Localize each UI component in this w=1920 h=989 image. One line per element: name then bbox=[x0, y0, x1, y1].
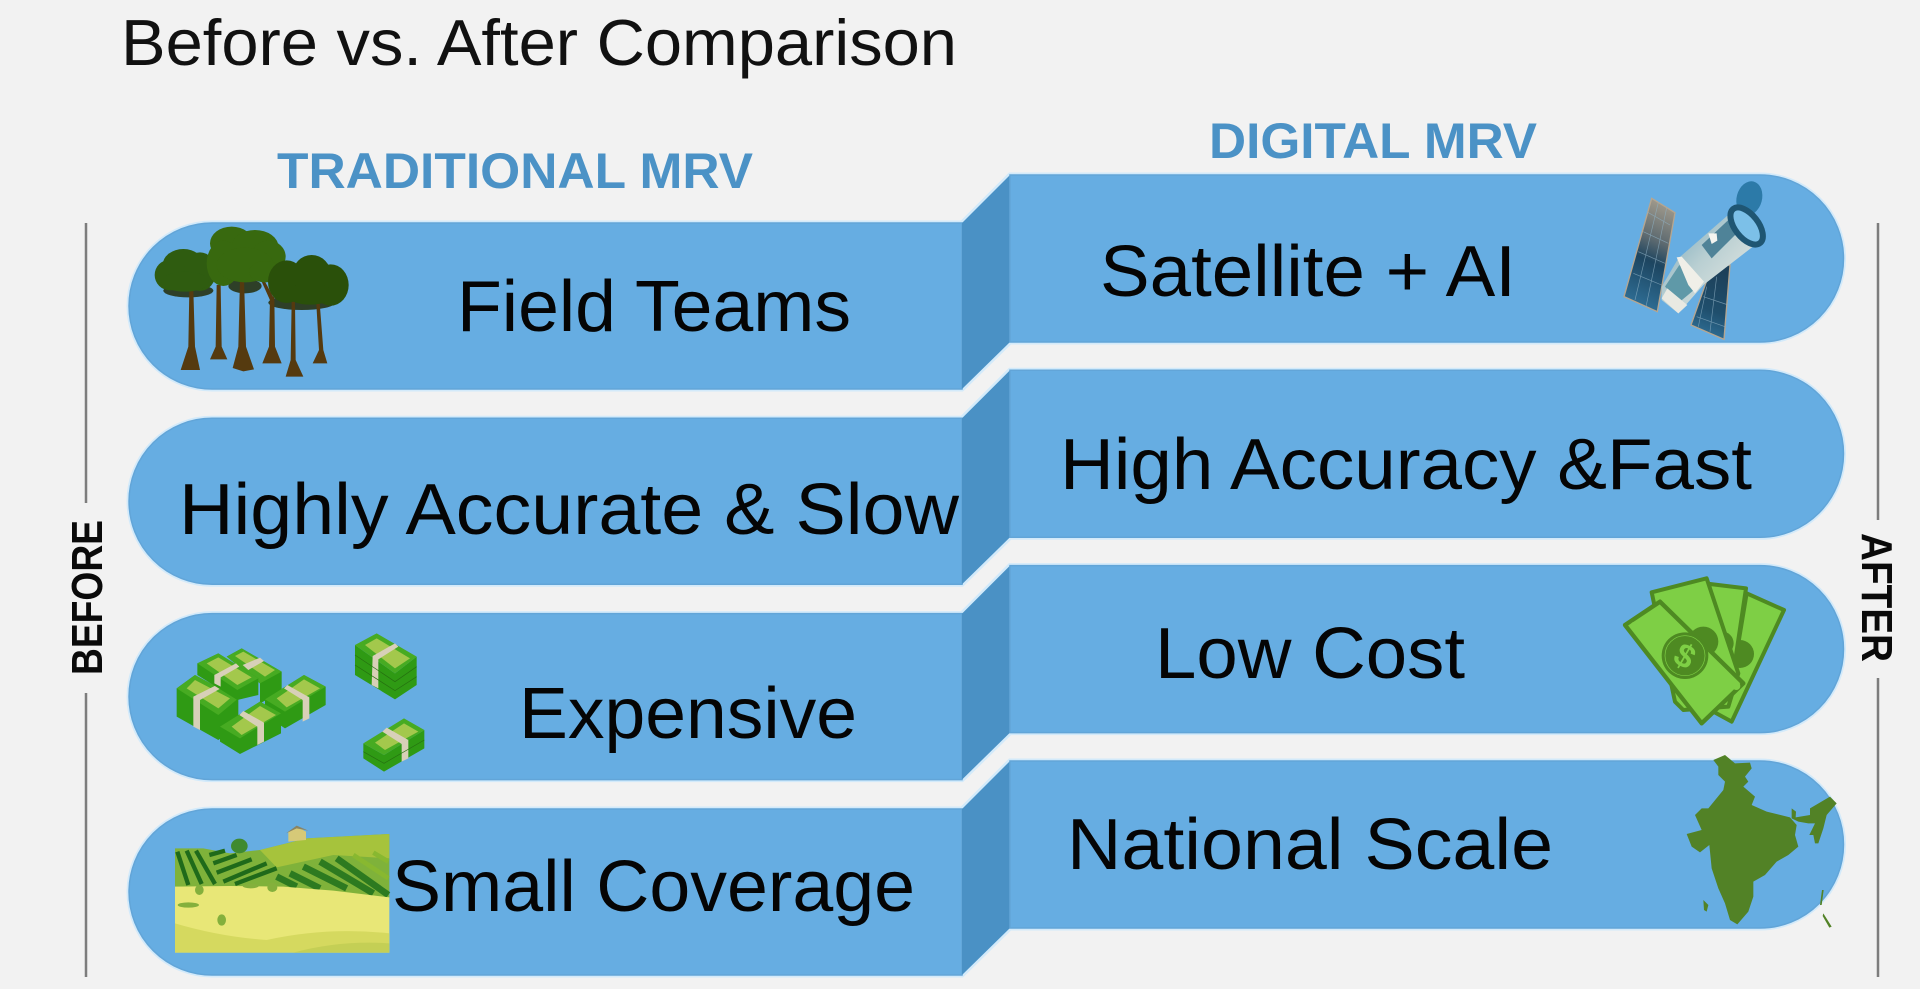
text: small coverage: Small Coverage bbox=[392, 847, 915, 927]
text: national scale: National Scale bbox=[1067, 805, 1553, 885]
icon: India map bbox=[1687, 755, 1837, 928]
icon: satellite bbox=[1624, 178, 1769, 339]
back bill right bbox=[1713, 593, 1784, 722]
row 1 ribbon bbox=[129, 175, 1844, 389]
heading: traditional MRV: TRADITIONAL MRV bbox=[277, 143, 754, 199]
heading: digital MRV: DIGITAL MRV bbox=[1209, 113, 1538, 169]
before axis line bbox=[85, 223, 87, 977]
after label: AFTER bbox=[1852, 533, 1901, 662]
cash stack lower right bbox=[363, 718, 424, 772]
text: high accuracy and fast: High Accuracy &Fast bbox=[1060, 425, 1752, 505]
text: field teams: Field Teams bbox=[457, 267, 851, 347]
back bill middle bbox=[1697, 584, 1746, 700]
text: low cost: Low Cost bbox=[1155, 614, 1465, 694]
icon: cash stacks bbox=[177, 633, 424, 772]
front bill bbox=[1625, 602, 1743, 723]
back bill left bbox=[1652, 578, 1738, 710]
row 4 ribbon bbox=[129, 761, 1844, 975]
before label: BEFORE bbox=[63, 520, 112, 675]
icon: banknotes fan bbox=[1625, 578, 1784, 723]
text: satellite plus AI: Satellite + AI bbox=[1100, 232, 1516, 312]
icon: trees bbox=[155, 227, 349, 377]
after axis line bbox=[1877, 223, 1879, 977]
title: Before vs. After Comparison bbox=[121, 6, 957, 79]
text: expensive: Expensive bbox=[519, 674, 857, 754]
cash stack cluster bbox=[177, 648, 326, 754]
row 3 ribbon bbox=[129, 566, 1844, 780]
text: highly accurate and slow: Highly Accurate & Slow bbox=[179, 470, 960, 550]
icon: farm field bbox=[175, 826, 389, 953]
icon: banknotes fan: $ bbox=[1667, 636, 1702, 678]
row 2 ribbon bbox=[129, 370, 1844, 584]
cash stack upper right bbox=[355, 633, 417, 699]
